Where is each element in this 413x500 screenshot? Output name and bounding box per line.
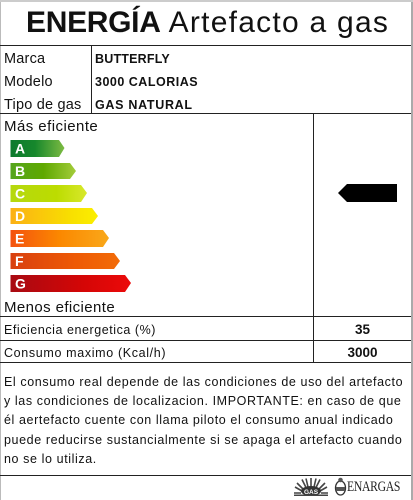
energy scale chart: [10, 140, 131, 292]
product details table: Marca: [4, 51, 45, 67]
band D: [10, 208, 98, 224]
band A: [10, 140, 64, 157]
icon: national emblem: [334, 478, 346, 496]
disclaimer text: puede reducirse sustancialmente si se apaga el artefacto cuando: [4, 433, 402, 447]
band A: A: [15, 140, 25, 156]
product details table: GAS NATURAL: [95, 98, 193, 112]
disclaimer text: él aertefacto cuente con llama piloto el consumo anual indicado: [4, 413, 393, 427]
band E: [10, 230, 109, 247]
label: most efficient: Más eficiente: [4, 118, 98, 135]
band C: C: [15, 186, 25, 202]
band B: B: [15, 163, 25, 179]
label: least efficient: Menos eficiente: [4, 299, 115, 316]
metric: energy efficiency: 35: [355, 322, 370, 337]
product details table: [4, 51, 198, 113]
disclaimer text: no se lo utiliza.: [4, 452, 97, 466]
metric: energy efficiency: Eficiencia energetica (%): [4, 323, 156, 337]
product details table: 3000 CALORIAS: [95, 75, 198, 89]
metric: maximum consumption: 3000: [347, 345, 378, 360]
metric: energy efficiency: [4, 322, 370, 337]
icon: gas sunburst logo: [294, 478, 328, 496]
arrow: rating indicator: [338, 184, 397, 202]
band G: [10, 275, 131, 292]
disclaimer text: y las condiciones de localizacion. IMPORTANTE: en caso de que: [4, 394, 401, 408]
product details table: Tipo de gas: [4, 97, 81, 113]
metric: maximum consumption: Consumo maximo (Kcal/h): [4, 346, 166, 360]
band C: [10, 185, 87, 202]
product details table: BUTTERFLY: [95, 52, 170, 66]
metric: maximum consumption: [4, 345, 378, 360]
disclaimer text: El consumo real depende de las condiciones de uso del artefacto: [4, 375, 403, 389]
band F: F: [15, 253, 24, 269]
band G: G: [15, 276, 26, 292]
disclaimer text: [4, 375, 403, 466]
title: ENERGÍA Artefacto a gas: [26, 6, 389, 39]
icon: gas sunburst logo: GAS: [304, 489, 319, 496]
product details table: Modelo: [4, 74, 53, 90]
band E: E: [15, 230, 24, 246]
band B: [10, 163, 76, 179]
logo: ENARGAS: ENARGAS: [347, 479, 400, 495]
band F: [10, 253, 120, 269]
band D: D: [15, 208, 25, 224]
